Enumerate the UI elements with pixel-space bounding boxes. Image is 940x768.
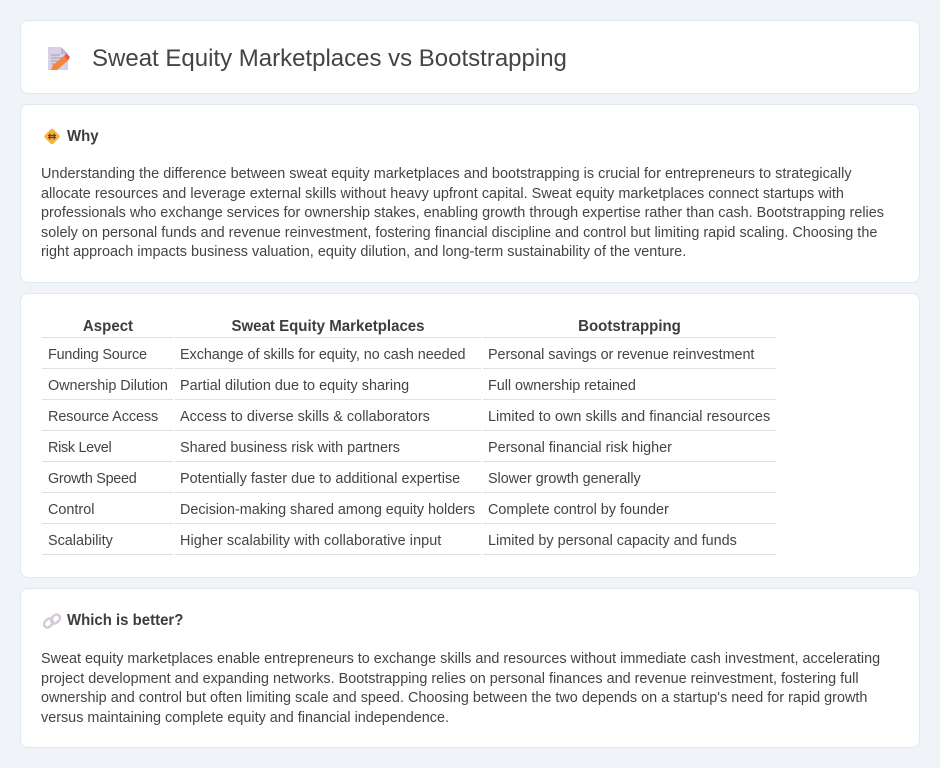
comparison table: Complete control by founder bbox=[488, 502, 669, 518]
panel: header bbox=[20, 20, 920, 94]
comparison table: Personal savings or revenue reinvestment bbox=[488, 347, 754, 363]
text block: why bbox=[41, 166, 884, 260]
comparison table: Aspect bbox=[83, 318, 133, 335]
panel: comparison table bbox=[20, 293, 920, 578]
comparison table: Control bbox=[48, 502, 94, 518]
comparison table bbox=[42, 318, 776, 555]
text block: which is better: Sweat equity marketplaces enable entrepreneurs to exchange skills and resources without immediate cash investment, accelerating bbox=[41, 651, 880, 667]
heading: which is better: Which is better? bbox=[67, 612, 183, 629]
comparison table: Bootstrapping bbox=[578, 318, 681, 335]
comparison table: Risk Level bbox=[48, 440, 111, 456]
text block: why: right approach impacts business valuation, equity dilution, and long-term sustainability of the venture. bbox=[41, 244, 686, 260]
comparison table: Resource Access bbox=[48, 409, 158, 425]
text block: which is better: ownership and control but often limiting scale and speed. Choosing between the two depends on a startup's need for rapid growth bbox=[41, 690, 867, 706]
comparison table: Sweat Equity Marketplaces bbox=[231, 318, 425, 335]
panel: which is better bbox=[20, 588, 920, 748]
comparison table: Scalability bbox=[48, 533, 113, 549]
comparison table: Shared business risk with partners bbox=[180, 440, 400, 456]
comparison table: Higher scalability with collaborative input bbox=[180, 533, 441, 549]
text block: which is better: versus maintaining complete equity and financial independence. bbox=[41, 710, 449, 726]
comparison table: Decision-making shared among equity holders bbox=[180, 502, 475, 518]
title: Sweat Equity Marketplaces vs Bootstrapping bbox=[92, 45, 567, 72]
panel: why bbox=[20, 104, 920, 283]
text block: which is better bbox=[41, 651, 880, 726]
comparison table: Limited to own skills and financial resources bbox=[488, 409, 770, 425]
text block: why: Understanding the difference between sweat equity marketplaces and bootstrapping is crucial for entrepreneurs to strategically bbox=[41, 166, 852, 182]
comparison table: Potentially faster due to additional expertise bbox=[180, 471, 460, 487]
text block: which is better: project development and expanding networks. Bootstrapping relies on personal finances and revenue reinvestment, fostering full bbox=[41, 671, 859, 687]
icon: diamond sign bbox=[44, 128, 60, 144]
comparison table: Full ownership retained bbox=[488, 378, 636, 394]
comparison table: Personal financial risk higher bbox=[488, 440, 672, 456]
comparison table: Funding Source bbox=[48, 347, 147, 363]
comparison table: Access to diverse skills & collaborators bbox=[180, 409, 430, 425]
text block: why: allocate resources and leverage external skills without heavy upfront capital. Sweat equity marketplaces connect startups with bbox=[41, 186, 844, 202]
heading: why: Why bbox=[67, 128, 99, 145]
icon: chain link bbox=[43, 613, 61, 629]
comparison table: Partial dilution due to equity sharing bbox=[180, 378, 409, 394]
text block: why: solely on personal funds and revenue reinvestment, fostering financial discipline and control but limiting rapid scaling. Choosing the bbox=[41, 225, 877, 241]
text block: why: professionals who exchange services for ownership stakes, enabling growth through expertise rather than cash. Bootstrapping relies bbox=[41, 205, 884, 221]
comparison table: Growth Speed bbox=[48, 471, 136, 487]
comparison table: Exchange of skills for equity, no cash needed bbox=[180, 347, 465, 363]
comparison table: Ownership Dilution bbox=[48, 378, 168, 394]
icon: document with pencil bbox=[48, 47, 70, 70]
comparison table: Limited by personal capacity and funds bbox=[488, 533, 737, 549]
comparison table: Slower growth generally bbox=[488, 471, 641, 487]
